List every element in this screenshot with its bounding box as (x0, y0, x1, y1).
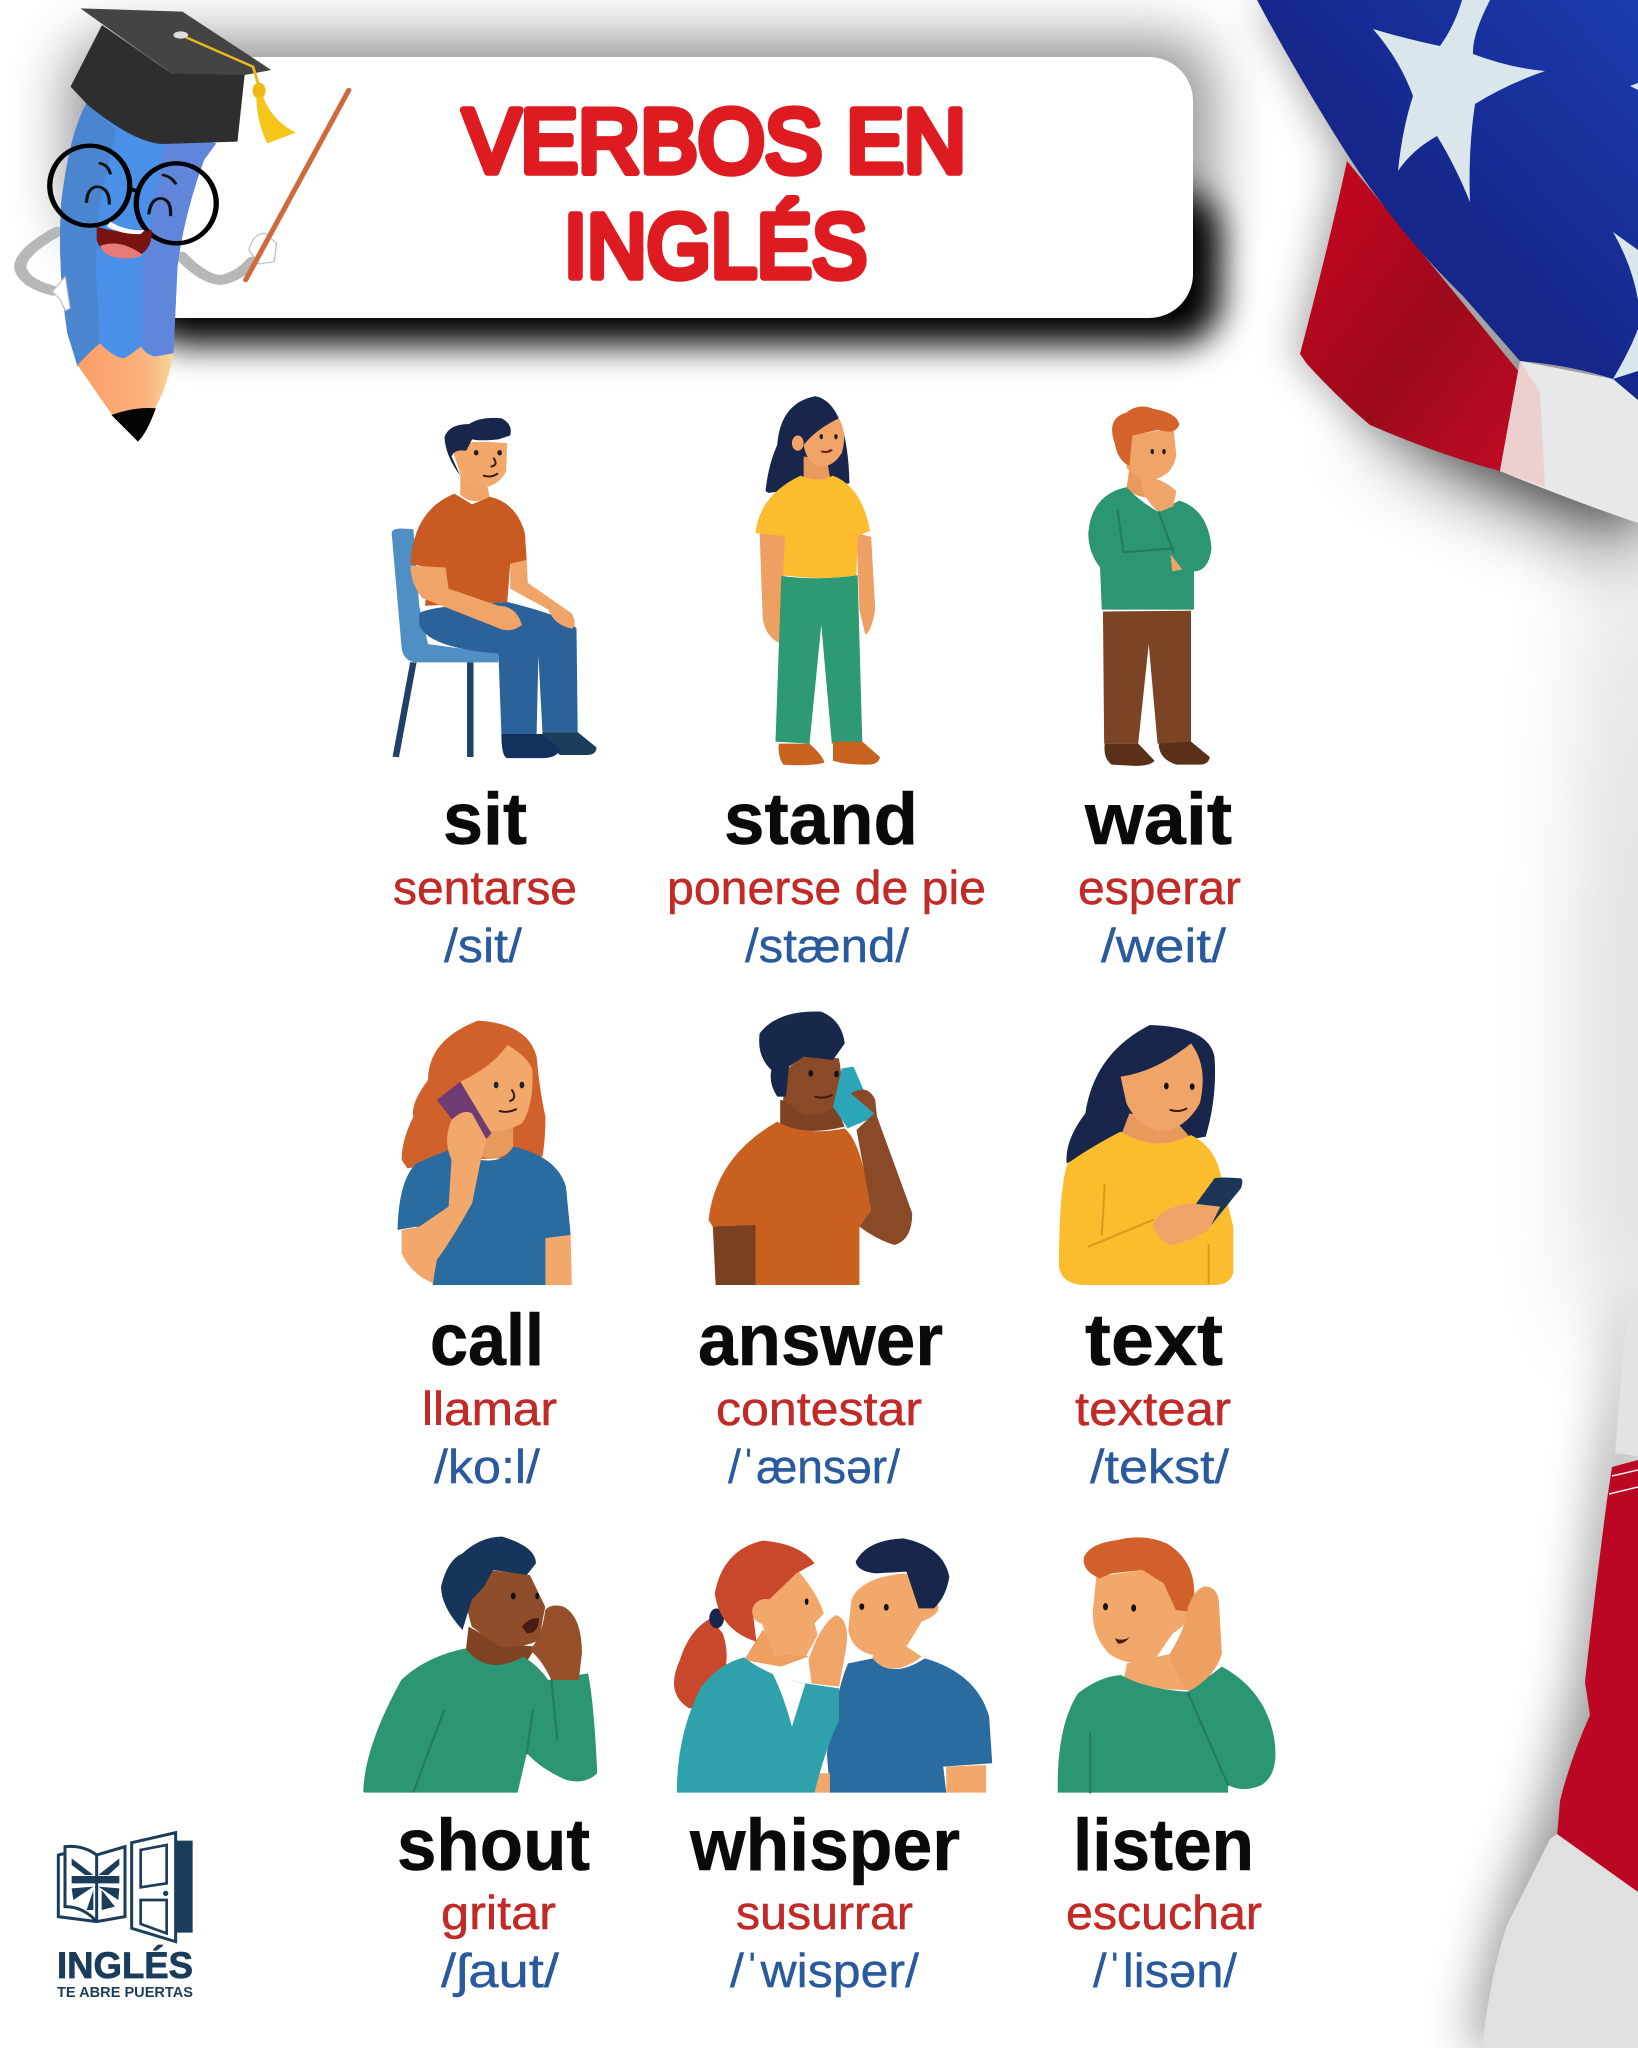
figure: woman standing (756, 396, 880, 765)
label: sit: sentarse (393, 861, 577, 914)
label: stand: stand (724, 779, 918, 860)
label: answer: answer (698, 1300, 943, 1381)
row 3 labels (397, 1805, 1262, 1997)
label: listen (1066, 1805, 1262, 1997)
label: call: call (430, 1300, 544, 1381)
logo tagline: TE ABRE PUERTAS (57, 1984, 193, 2001)
label: whisper: susurrar (736, 1886, 913, 1939)
logo icon: book and door (58, 1833, 193, 1942)
row 2 illustrations (398, 1012, 1242, 1285)
row 1 illustrations (392, 396, 1212, 766)
figure: man sitting on chair (392, 418, 596, 758)
figure: woman on phone call (398, 1021, 572, 1285)
label: wait: /weit/ (1101, 919, 1227, 972)
figure: girl whispering to boy (674, 1538, 992, 1793)
banner drop shadow (70, 40, 1222, 345)
pointer stick (246, 90, 349, 280)
label: shout: /ʃaut/ (441, 1944, 560, 1997)
flag: bottom right edge (1482, 1300, 1638, 2048)
label: text: /tekst/ (1090, 1440, 1230, 1493)
title banner (120, 57, 1193, 318)
flag and page shadows (1257, 0, 1638, 2048)
label: sit: sit (443, 779, 527, 860)
glasses and face (50, 146, 216, 259)
logo: inglés te abre puertas (57, 1833, 193, 2001)
figure: woman texting (1059, 1025, 1242, 1285)
label: listen: /ˈlisən/ (1093, 1944, 1238, 1997)
label: wait: wait (1084, 779, 1232, 860)
label: shout: shout (397, 1805, 590, 1886)
label: call: /ko:l/ (434, 1440, 541, 1493)
mascot: pencil teacher (20, 8, 349, 442)
label: listen: escuchar (1066, 1886, 1262, 1939)
label: stand: ponerse de pie (667, 861, 986, 914)
figure: man answering phone (709, 1012, 912, 1285)
title: verbos en inglés: VERBOS EN (463, 92, 966, 192)
figure: man waiting with hand on chin (1088, 407, 1212, 766)
pencil body (60, 103, 216, 367)
label: whisper: /ˈwisper/ (730, 1944, 920, 1997)
label: text: text (1085, 1300, 1223, 1381)
star: large (1373, 0, 1545, 202)
row 2 labels (422, 1300, 1231, 1493)
mascot hands (52, 233, 277, 311)
label: whisper: whisper (689, 1805, 960, 1886)
label: shout: gritar (441, 1886, 556, 1939)
mascot arms (20, 232, 252, 291)
label: wait: esperar (1078, 861, 1241, 914)
label: text (1075, 1300, 1231, 1493)
graduation cap (71, 8, 296, 144)
title: verbos en inglés: INGLÉS (564, 197, 867, 297)
flag: top right corner (1257, 0, 1638, 523)
logo wordmark: INGLÉS (57, 1945, 193, 1986)
label: stand (667, 779, 986, 972)
label: answer: contestar (716, 1382, 922, 1435)
label: wait (1078, 779, 1241, 972)
label: shout (397, 1805, 590, 1997)
label: call (422, 1300, 557, 1493)
pencil tip (78, 343, 173, 442)
label: call: llamar (422, 1382, 557, 1435)
label: whisper (689, 1805, 960, 1997)
label: stand: /stænd/ (745, 919, 910, 972)
label: sit (393, 779, 577, 972)
label: answer: /ˈænsər/ (728, 1440, 901, 1493)
row 3 illustrations (363, 1537, 1275, 1793)
label: answer (698, 1300, 943, 1493)
title: verbos en inglés (463, 92, 966, 297)
label: text: textear (1075, 1382, 1231, 1435)
label: listen: listen (1073, 1805, 1254, 1886)
row 1 labels (393, 779, 1241, 972)
label: sit: /sit/ (444, 919, 523, 972)
figure: man shouting (363, 1537, 597, 1793)
figure: boy listening (1058, 1537, 1275, 1793)
